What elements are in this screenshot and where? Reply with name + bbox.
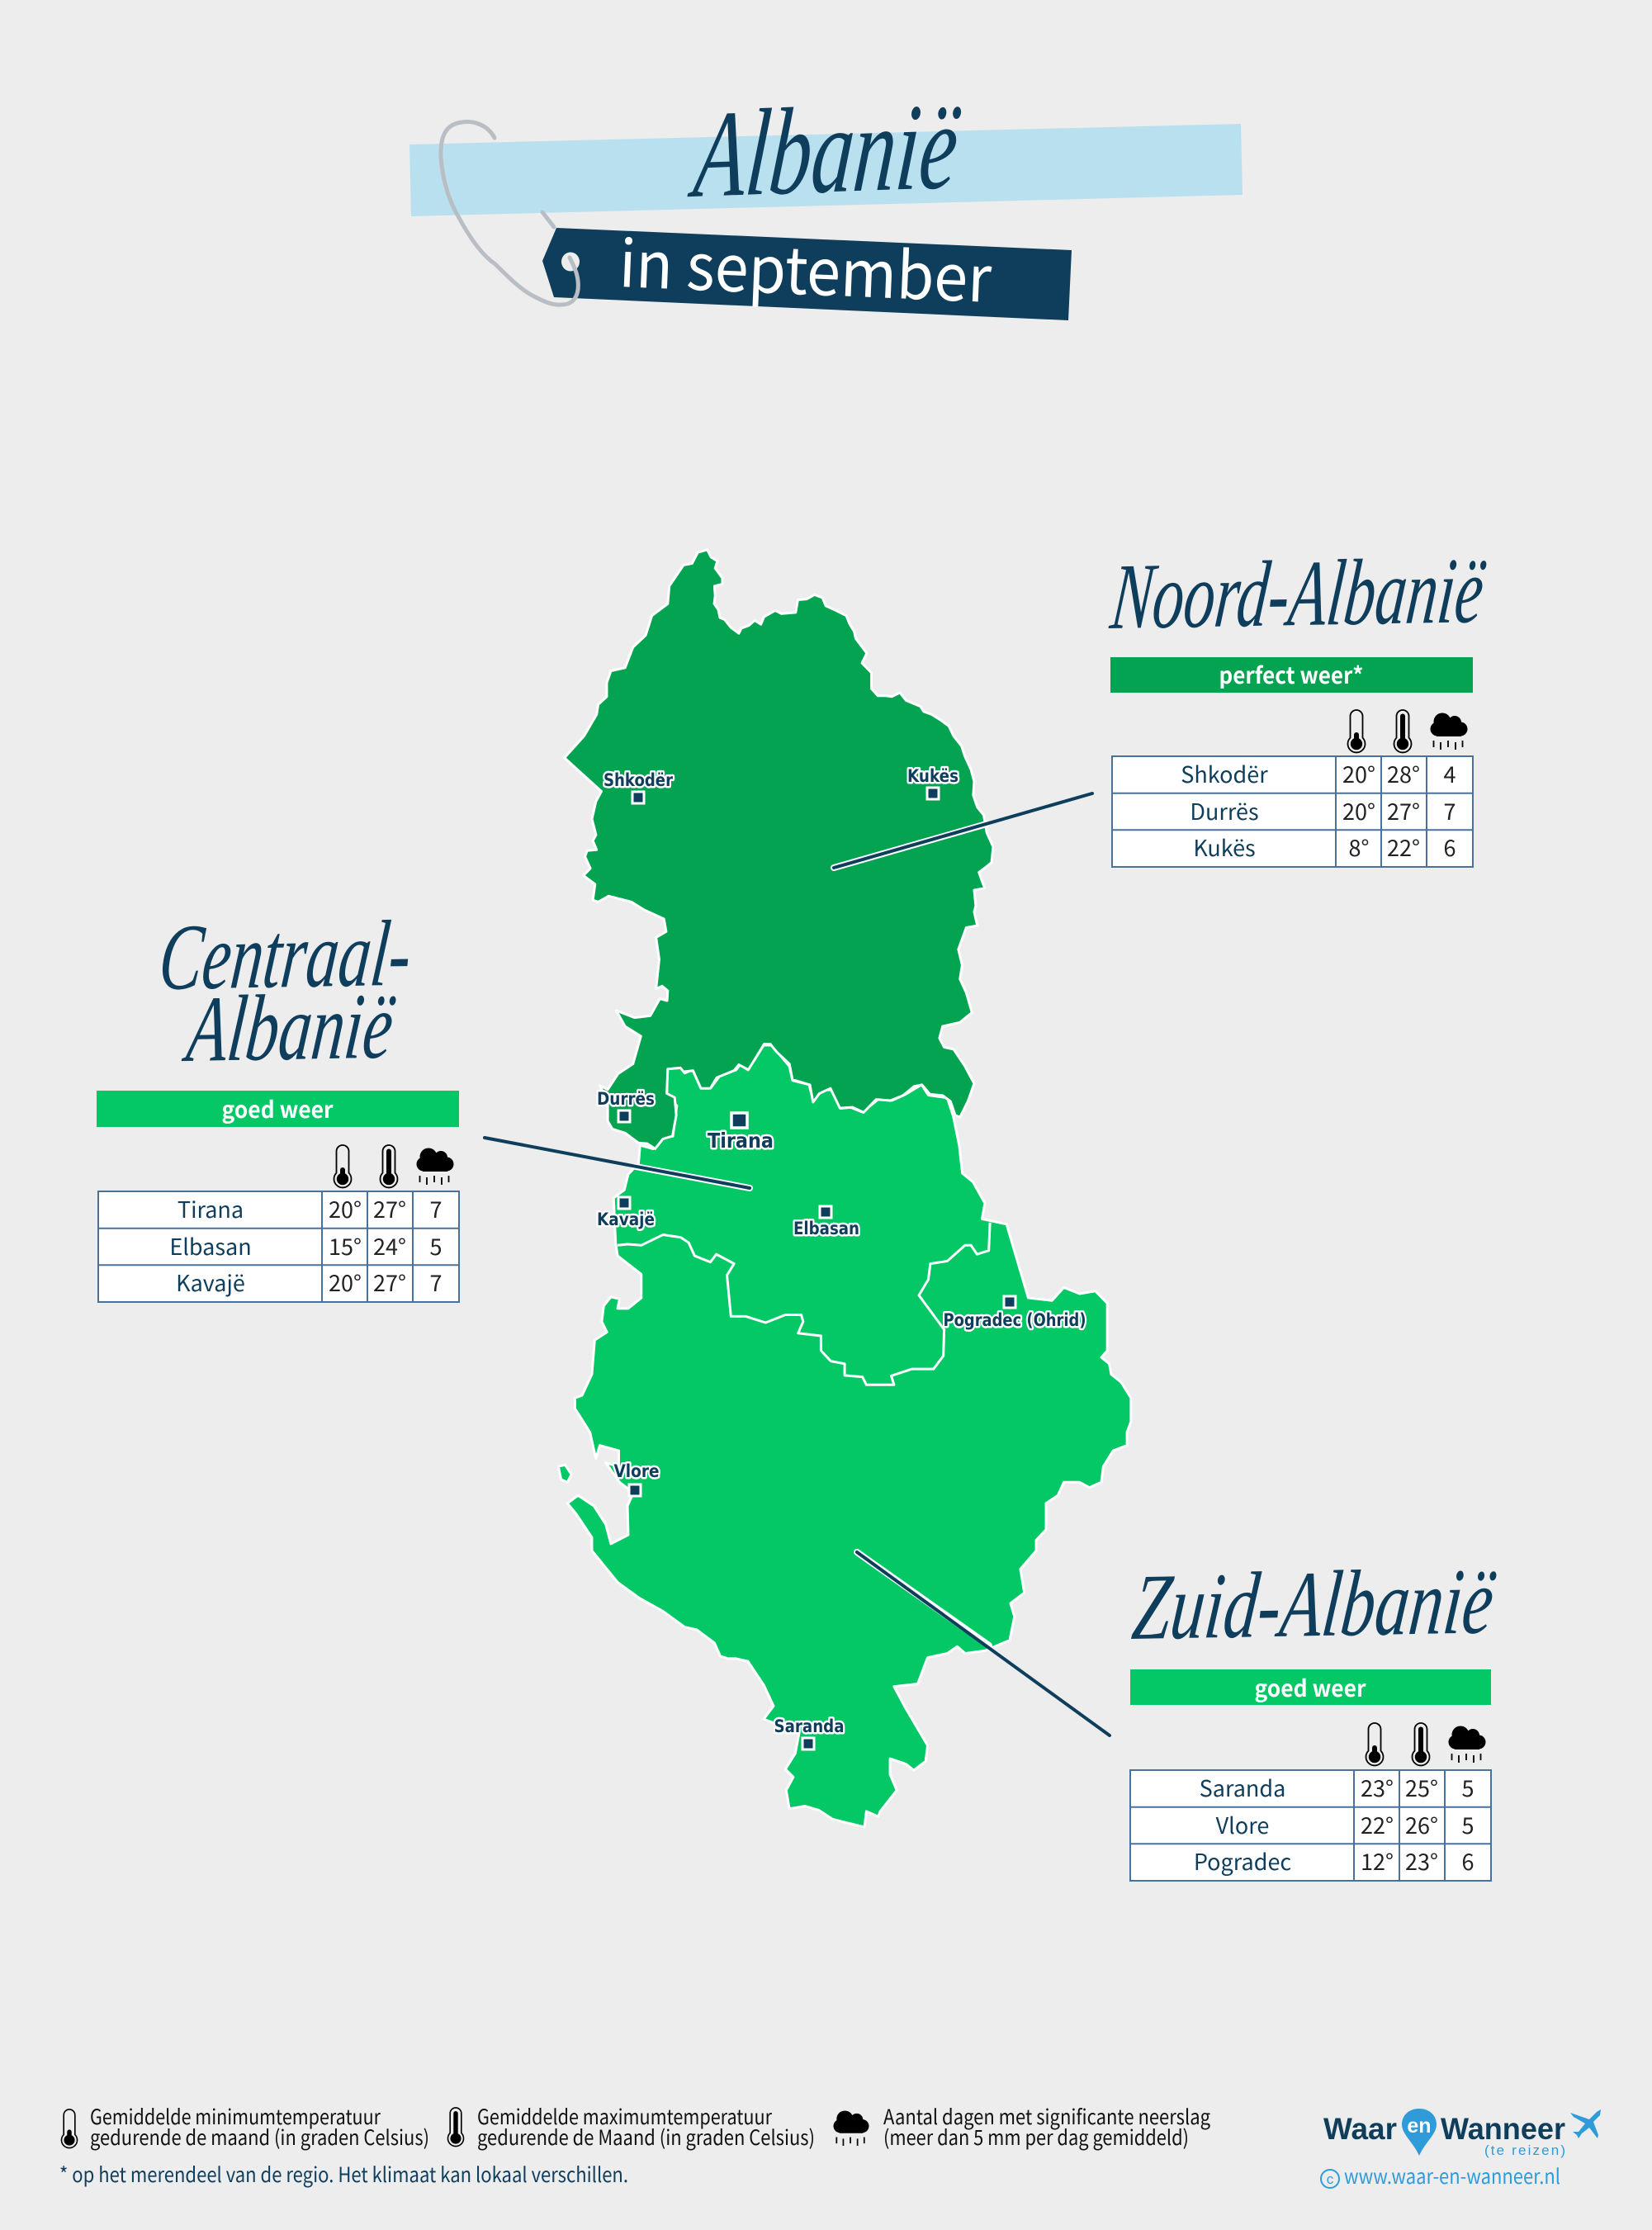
city: Pogradec (Ohrid): Pogradec (Ohrid) bbox=[943, 1310, 1086, 1330]
weather table: Vlore bbox=[1216, 1808, 1269, 1840]
leader line: north bbox=[834, 793, 1092, 868]
weather table: 25° bbox=[1405, 1771, 1438, 1803]
logo wordmark: Wanneer: Wanneer bbox=[1441, 2112, 1565, 2146]
weather table: 27° bbox=[373, 1266, 406, 1298]
weather table: 20° bbox=[329, 1266, 362, 1298]
city: Vlore: Vlore bbox=[614, 1461, 659, 1481]
city: Pogradec (Ohrid) bbox=[943, 1296, 1086, 1330]
heading: Zuid-Albanië: Zuid-Albanië bbox=[1128, 1549, 1499, 1660]
city: Shkodër bbox=[604, 770, 674, 803]
city: Saranda bbox=[774, 1716, 844, 1749]
logo plane icon bbox=[1570, 2109, 1601, 2138]
legend: precipitation bbox=[833, 2101, 1210, 2152]
column icons bbox=[334, 1145, 454, 1187]
weather table: 28° bbox=[1387, 757, 1420, 789]
panel: Centraal-Albanië bbox=[97, 902, 459, 1302]
city: Tirana bbox=[708, 1113, 774, 1153]
panel: Zuid-Albanië bbox=[1128, 1549, 1499, 1881]
city: Shkodër: Shkodër bbox=[604, 770, 674, 790]
rating bar: goed weer bbox=[1130, 1669, 1491, 1705]
legend: maximum temperature bbox=[447, 2101, 815, 2152]
weather table: 27° bbox=[373, 1192, 406, 1224]
city: Durrës: Durrës bbox=[597, 1089, 655, 1109]
legend: precipitation: (meer dan 5 mm per dag gemiddeld) bbox=[883, 2122, 1189, 2152]
heading: Centraal-Albanië: Centraal- bbox=[154, 902, 416, 1011]
light blue title band bbox=[409, 124, 1243, 216]
weather table: 4 bbox=[1443, 757, 1456, 789]
rating bar: perfect weer bbox=[1110, 657, 1473, 693]
weather table: 24° bbox=[373, 1229, 406, 1262]
weather table: 22° bbox=[1361, 1808, 1394, 1840]
weather table: Kukës bbox=[1193, 831, 1256, 863]
rating bar: perfect weer: perfect weer* bbox=[1219, 658, 1364, 691]
leader line: south bbox=[857, 1552, 1110, 1735]
weather table: 5 bbox=[429, 1229, 443, 1262]
column icons bbox=[1366, 1723, 1486, 1765]
weather table: 6 bbox=[1461, 1844, 1474, 1877]
subtitle: in september: in september bbox=[618, 213, 994, 321]
title block bbox=[409, 77, 1243, 321]
weather table: 20° bbox=[1342, 794, 1375, 826]
column icons bbox=[1347, 710, 1468, 752]
weather table bbox=[1130, 1770, 1491, 1881]
legend: minimum temperature bbox=[61, 2101, 429, 2152]
weather table bbox=[98, 1191, 459, 1302]
weather table: 22° bbox=[1387, 831, 1420, 863]
map of Albania bbox=[485, 550, 1131, 1827]
city: Elbasan: Elbasan bbox=[793, 1219, 859, 1238]
city: Kavajë bbox=[597, 1197, 655, 1229]
tag string bbox=[441, 122, 578, 305]
rating bar: goed weer: goed weer bbox=[221, 1092, 334, 1125]
weather table: 5 bbox=[1461, 1771, 1474, 1803]
weather table: Kavajë bbox=[176, 1266, 245, 1298]
legend: minimum temperature: Gemiddelde minimumtemperatuur bbox=[90, 2101, 381, 2131]
legend: maximum temperature: Gemiddelde maximumtemperatuur bbox=[477, 2101, 772, 2131]
weather table: Shkodër bbox=[1181, 757, 1268, 789]
weather table: 15° bbox=[329, 1229, 362, 1262]
city: Tirana: Tirana bbox=[708, 1129, 774, 1153]
weather table: 7 bbox=[1443, 794, 1456, 826]
weather table: 7 bbox=[429, 1266, 443, 1298]
heading: Centraal-Albanië bbox=[154, 902, 416, 1082]
rating bar: goed weer bbox=[97, 1091, 459, 1127]
city: Elbasan bbox=[793, 1206, 859, 1238]
heading: Noord-Albanië: Noord-Albanië bbox=[1106, 538, 1489, 650]
title: Albanië: Albanië bbox=[685, 77, 964, 224]
weather table: 23° bbox=[1361, 1771, 1394, 1803]
logo: Waar en Wanneer bbox=[1321, 2109, 1601, 2190]
logo pin with en bbox=[1402, 2109, 1437, 2156]
city: Kukës bbox=[907, 766, 959, 799]
weather table: Tirana bbox=[178, 1192, 244, 1224]
logo pin with en: en bbox=[1407, 2114, 1432, 2138]
copyright and website: www.waar-en-wanneer.nl bbox=[1344, 2161, 1560, 2190]
legend: minimum temperature: gedurende de maand (in graden Celsius) bbox=[90, 2122, 429, 2152]
weather table: 12° bbox=[1361, 1844, 1394, 1877]
weather table: 20° bbox=[1342, 757, 1375, 789]
luggage tag bbox=[542, 228, 1072, 320]
region: Sazan island bbox=[558, 1465, 571, 1482]
weather table: 23° bbox=[1405, 1844, 1438, 1877]
weather table: 8° bbox=[1349, 831, 1369, 863]
weather table: Elbasan bbox=[169, 1229, 252, 1262]
heading: Centraal-Albanië: Albanië bbox=[179, 974, 399, 1082]
footnote: * op het merendeel van de regio. Het klimaat kan lokaal verschillen. bbox=[59, 2159, 628, 2189]
weather table: 20° bbox=[329, 1192, 362, 1224]
legend: precipitation: Aantal dagen met significante neerslag bbox=[883, 2101, 1210, 2131]
copyright and website: c bbox=[1327, 2171, 1334, 2187]
weather table: Saranda bbox=[1200, 1771, 1285, 1803]
city: Saranda: Saranda bbox=[774, 1716, 844, 1736]
legend bbox=[59, 2101, 1210, 2189]
weather table: 27° bbox=[1387, 794, 1420, 826]
weather table: 26° bbox=[1405, 1808, 1438, 1840]
rating bar: goed weer: goed weer bbox=[1255, 1671, 1366, 1704]
weather table: 7 bbox=[429, 1192, 443, 1224]
city: Kavajë: Kavajë bbox=[597, 1210, 655, 1229]
logo wordmark: Waar: Waar bbox=[1323, 2112, 1397, 2146]
weather table: 5 bbox=[1461, 1808, 1474, 1840]
panel: Noord-Albanië bbox=[1106, 538, 1489, 867]
weather table: 6 bbox=[1443, 831, 1456, 863]
border between central and south bbox=[618, 1223, 990, 1385]
region: north Albania bbox=[565, 550, 993, 1148]
city: Durrës bbox=[597, 1089, 655, 1122]
weather table: Durrës bbox=[1190, 794, 1259, 826]
city: Kukës: Kukës bbox=[907, 766, 959, 786]
legend: maximum temperature: gedurende de Maand (in graden Celsius) bbox=[477, 2122, 815, 2152]
leader line: central bbox=[485, 1138, 750, 1188]
tag hole bbox=[561, 253, 580, 271]
logo tagline: (te reizen) bbox=[1484, 2142, 1565, 2158]
weather table: Pogradec bbox=[1194, 1844, 1291, 1877]
region: south and central Albania bbox=[567, 1045, 1131, 1827]
weather table bbox=[1112, 756, 1473, 867]
city: Vlore bbox=[614, 1461, 659, 1496]
